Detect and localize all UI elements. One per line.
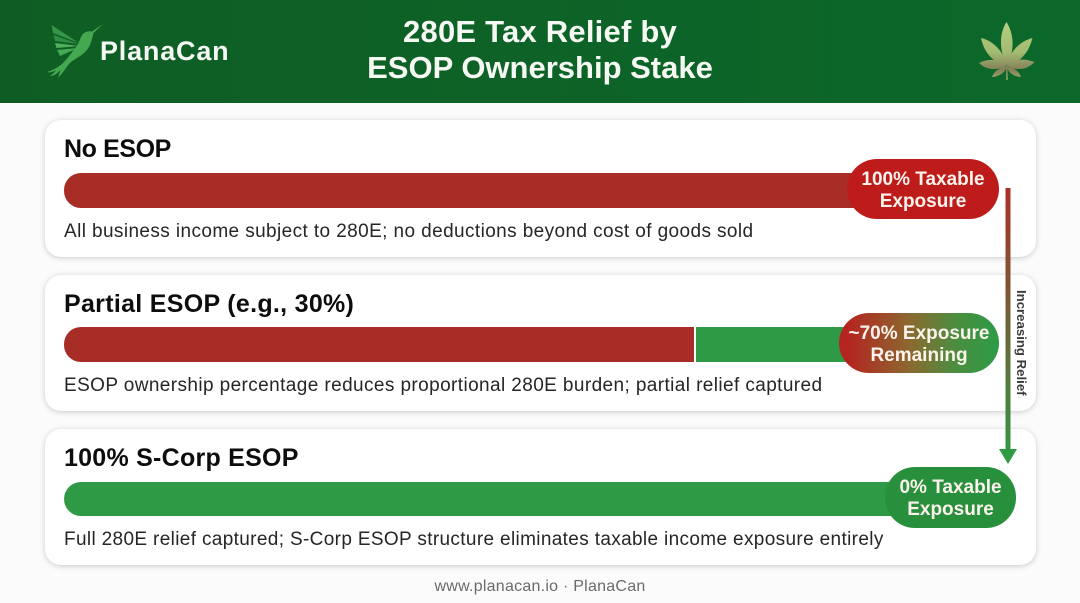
logo wordmark: PlanaCan xyxy=(100,36,229,66)
callout: ~70% exposure remaining xyxy=(839,313,999,373)
callout: 100% taxable exposure: 100% Taxable xyxy=(861,169,985,190)
callout: ~70% exposure remaining: ~70% Exposure xyxy=(848,323,990,344)
bar: red portion xyxy=(64,327,694,362)
bar: green portion xyxy=(696,327,856,362)
description: No ESOP: All business income subject to 280E; no deductions beyond cost of goods sold xyxy=(64,221,753,242)
title: 280E Tax Relief by xyxy=(403,14,677,49)
header band xyxy=(0,0,1080,103)
logo: hummingbird xyxy=(47,24,103,78)
title xyxy=(367,14,713,85)
icon: cannabis leaf xyxy=(979,22,1034,80)
panel: No ESOP xyxy=(45,120,1036,257)
arrow: increasing relief xyxy=(999,188,1017,464)
callout: 100% taxable exposure: Exposure xyxy=(880,191,966,212)
heading: Partial ESOP: Partial ESOP (e.g., 30%) xyxy=(64,290,354,318)
description: 100% S-Corp ESOP: Full 280E relief captured; S-Corp ESOP structure eliminates taxable income exposure entirely xyxy=(64,529,884,550)
heading: No ESOP: No ESOP xyxy=(64,135,171,163)
description: Partial ESOP: ESOP ownership percentage reduces proportional 280E burden; partial relief captured xyxy=(64,375,822,396)
callout: 0% taxable exposure xyxy=(885,467,1016,528)
callout: ~70% exposure remaining: Remaining xyxy=(870,345,968,366)
callout: 0% taxable exposure: Exposure xyxy=(907,499,994,520)
bar: full green xyxy=(64,482,904,516)
callout: 0% taxable exposure: 0% Taxable xyxy=(899,477,1002,498)
panel: 100% S-Corp ESOP xyxy=(45,429,1036,565)
bar: full red xyxy=(64,173,864,208)
title: ESOP Ownership Stake xyxy=(367,50,713,85)
callout: 100% taxable exposure xyxy=(847,159,999,219)
panel: Partial ESOP xyxy=(45,275,1036,411)
heading: 100% S-Corp ESOP: 100% S-Corp ESOP xyxy=(64,444,299,472)
footer: www.planacan.io · PlanaCan xyxy=(434,578,646,595)
arrow label: Increasing Relief xyxy=(1014,290,1029,396)
